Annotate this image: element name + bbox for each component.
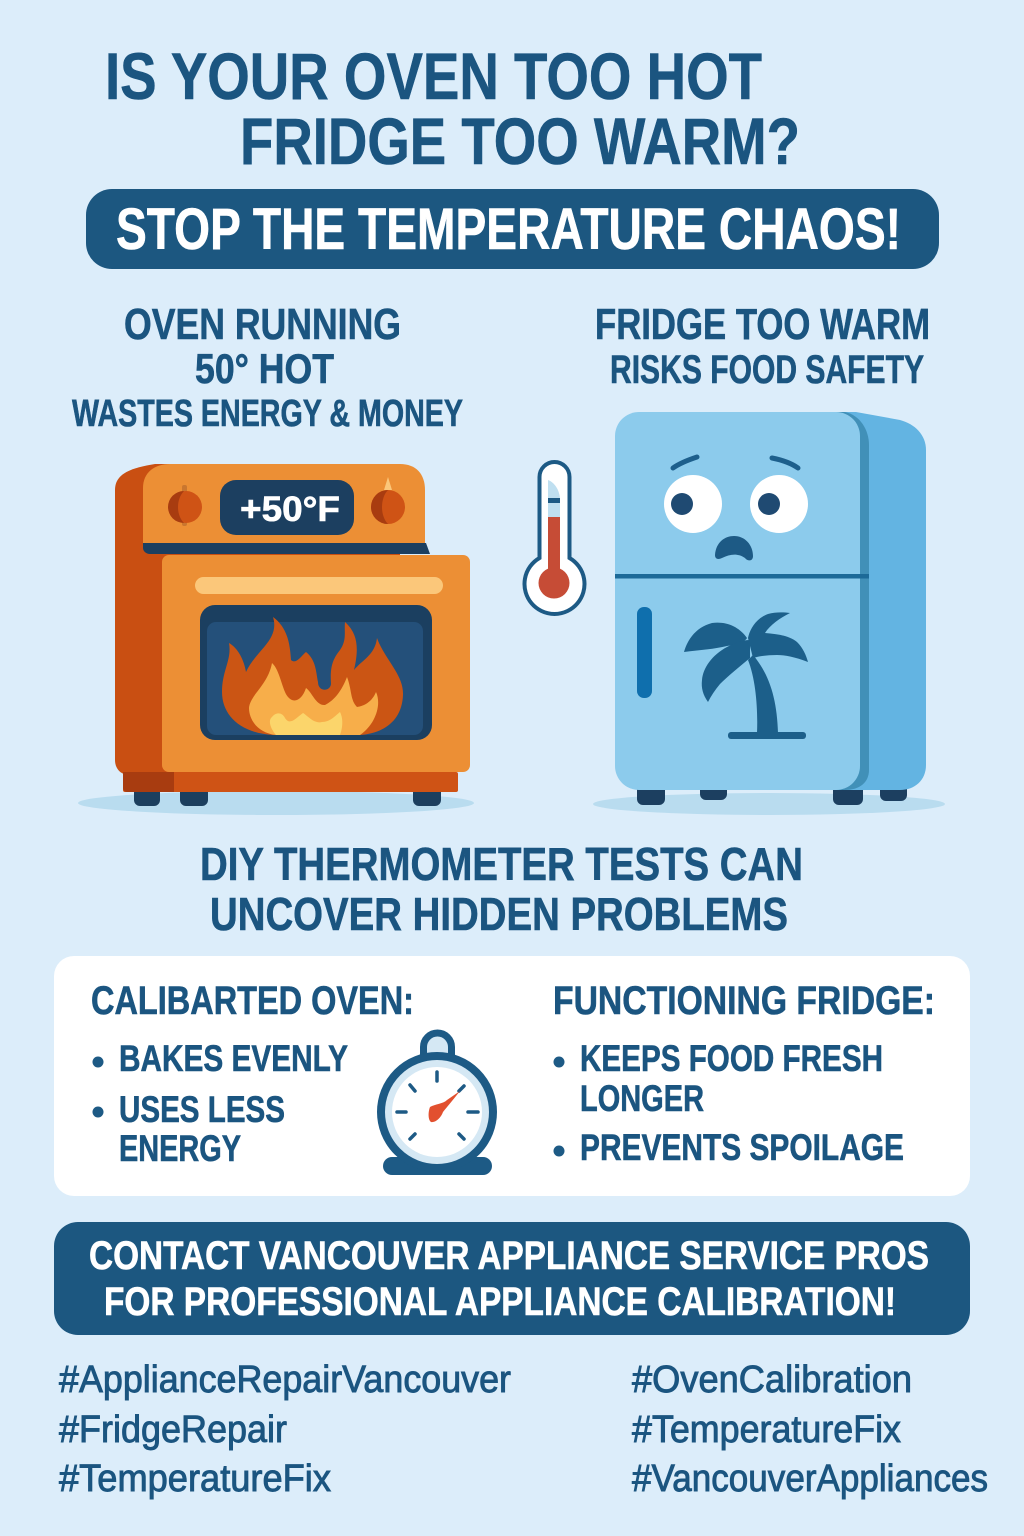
- calibrated oven column: ENERGY: [119, 1128, 241, 1169]
- hashtags left: #ApplianceRepairVancouver: [59, 1359, 511, 1401]
- icon: thermometer: [524, 462, 584, 614]
- oven knobs: [168, 477, 405, 526]
- icon: hot oven: [78, 464, 474, 815]
- calibrated oven column: USES LESS: [119, 1089, 285, 1130]
- call to action: FOR PROFESSIONAL APPLIANCE CALIBRATION!: [104, 1280, 896, 1324]
- heading: DIY thermometer tests: [200, 838, 803, 940]
- title: FRIDGE TOO WARM?: [240, 104, 800, 178]
- heading: fridge problem: RISKS FOOD SAFETY: [610, 348, 924, 392]
- calibrated oven column: BAKES EVENLY: [119, 1038, 348, 1079]
- fridge face: [664, 457, 808, 560]
- title: [105, 39, 800, 178]
- hashtags left: #FridgeRepair: [59, 1409, 287, 1451]
- functioning fridge column: LONGER: [580, 1078, 704, 1119]
- icon: oven timer: [381, 1033, 493, 1175]
- heading: oven problem: WASTES ENERGY & MONEY: [72, 393, 463, 435]
- heading: oven problem: [72, 300, 463, 435]
- oven temperature display: +50°F: [240, 490, 340, 529]
- hashtags right: [632, 1359, 988, 1500]
- functioning fridge column: FUNCTIONING FRIDGE:: [553, 979, 935, 1023]
- panel: benefits: [54, 956, 970, 1196]
- heading: DIY thermometer tests: UNCOVER HIDDEN PROBLEMS: [210, 888, 788, 940]
- hashtags right: #VancouverAppliances: [632, 1458, 988, 1500]
- heading: oven problem: OVEN RUNNING: [124, 300, 401, 349]
- calibrated oven column: [91, 979, 414, 1169]
- heading: oven problem: 50° HOT: [195, 345, 334, 392]
- fridge handle: [637, 607, 652, 698]
- icon: worried fridge: [593, 412, 945, 815]
- hashtags right: #OvenCalibration: [632, 1359, 912, 1401]
- functioning fridge column: KEEPS FOOD FRESH: [580, 1038, 883, 1079]
- calibrated oven column: CALIBARTED OVEN:: [91, 979, 414, 1023]
- hashtags left: #TemperatureFix: [59, 1458, 331, 1500]
- palm tree: [684, 612, 808, 739]
- functioning fridge column: PREVENTS SPOILAGE: [580, 1127, 904, 1168]
- oven flame: [222, 617, 403, 735]
- functioning fridge column: [553, 979, 935, 1168]
- heading: fridge problem: [595, 300, 930, 392]
- heading: DIY thermometer tests: DIY THERMOMETER TESTS CAN: [200, 838, 803, 890]
- heading: fridge problem: FRIDGE TOO WARM: [595, 300, 930, 349]
- title: IS YOUR OVEN TOO HOT: [105, 39, 762, 113]
- hashtags right: #TemperatureFix: [632, 1409, 901, 1451]
- call to action: [54, 1222, 970, 1335]
- hashtags left: [59, 1359, 511, 1500]
- oven temperature display: [220, 480, 354, 535]
